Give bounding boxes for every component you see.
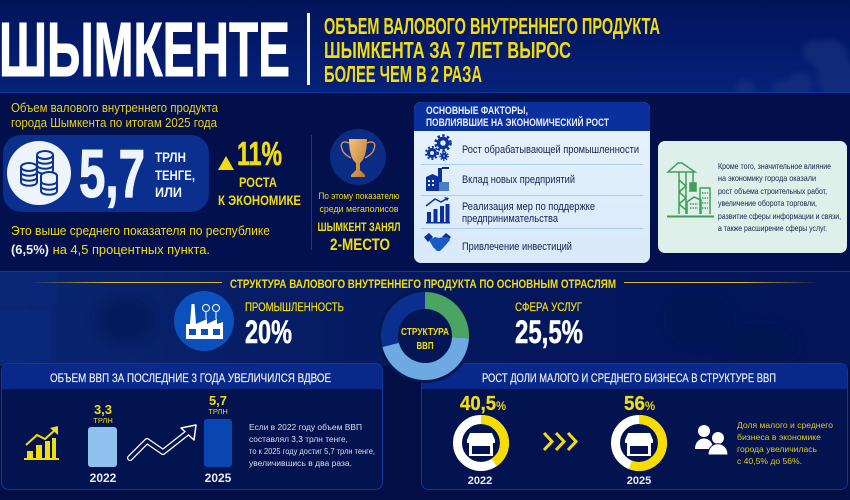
additional factors text: увеличение оборота торговли, <box>718 198 817 208</box>
intro text: Объем валового внутреннего продукта <box>11 101 218 115</box>
icon: factory circle <box>174 291 234 351</box>
bar 2022: 3,3 <box>94 402 112 417</box>
headline: ШЫМКЕНТА ЗА 7 ЛЕТ ВЫРОС <box>324 37 571 63</box>
icon: yellow chart <box>24 426 59 460</box>
panel: GDP 3 years <box>2 364 382 490</box>
stat: services: СФЕРА УСЛУГ <box>515 302 583 314</box>
donut label: ВВП <box>416 340 434 352</box>
panel: GDP value <box>3 135 209 212</box>
icon: coins <box>7 141 71 205</box>
section heading: СТРУКТУРА ВАЛОВОГО ВНУТРЕННЕГО ПРОДУКТА ПО ОСНОВНЫМ ОТРАСЛЯМ <box>230 277 616 291</box>
bar 2022: 2022 <box>90 471 117 485</box>
unit <box>155 150 195 200</box>
donut label: СТРУКТУРА <box>401 326 449 338</box>
stat 2022 <box>458 393 506 487</box>
stat 2022: 40,5% <box>460 393 506 415</box>
SME text: города увеличилась <box>737 444 818 454</box>
panel heading: РОСТ ДОЛИ МАЛОГО И СРЕДНЕГО БИЗНЕСА В СТРУКТУРЕ ВВП <box>482 373 776 385</box>
panel: main factors <box>414 102 650 263</box>
unit: ТРЛН <box>155 150 186 165</box>
icon: crane and buildings <box>667 163 714 216</box>
bar 2025: 2025 <box>205 471 232 485</box>
growth 11% <box>218 135 301 208</box>
factors heading: ОСНОВНЫЕ ФАКТОРЫ, <box>426 105 528 117</box>
panel: SME share <box>422 364 848 490</box>
explanation: увеличившись в два раза. <box>249 458 352 468</box>
rank text: среди мегаполисов <box>320 204 399 214</box>
growth 11%: 11% <box>237 135 282 172</box>
bar 2022 <box>88 402 117 485</box>
stat 2022: 2022 <box>468 475 492 487</box>
donut label <box>401 326 449 352</box>
headline: ОБЪЕМ ВАЛОВОГО ВНУТРЕННЕГО ПРОДУКТА <box>324 13 660 39</box>
factor labels: Реализация мер по поддержке <box>462 201 595 213</box>
explanation: составлял 3,3 трлн тенге, <box>249 434 348 444</box>
stat: services: 25,5% <box>515 314 583 350</box>
factor labels: Вклад новых предприятий <box>462 174 575 186</box>
headline <box>324 13 660 87</box>
stat 2025: 2025 <box>627 475 651 487</box>
factors heading <box>426 105 609 129</box>
SME text <box>737 420 833 466</box>
unit: ТЕНГЕ, <box>155 168 195 183</box>
SME text: с 40,5% до 56%. <box>737 456 802 466</box>
icon: factory <box>426 167 449 191</box>
stat: industry: ПРОМЫШЛЕННОСТЬ <box>245 302 344 314</box>
explanation <box>249 422 375 468</box>
comparison text: (6,5%) на 4,5 процентных пункта. <box>11 242 210 257</box>
additional factors text <box>718 161 841 233</box>
factor labels: Привлечение инвестиций <box>462 241 572 253</box>
comparison text <box>11 223 270 257</box>
icon: growth chart <box>426 197 450 224</box>
divider <box>311 135 312 250</box>
stat: industry <box>245 302 344 350</box>
SME text: Доля малого и среднего <box>737 420 833 430</box>
value 5,7: 5,7 <box>79 136 145 212</box>
factor labels: предпринимательства <box>462 213 559 225</box>
title city name: ШЫМКЕНТЕ <box>0 7 290 93</box>
factor labels: Рост обрабатывающей промышленности <box>462 144 639 156</box>
intro text: города Шымкента по итогам 2025 года <box>11 116 217 130</box>
SME text: бизнеса в экономике <box>737 432 821 442</box>
chevrons <box>544 433 576 450</box>
rank text: По этому показателю <box>318 191 400 201</box>
donut chart <box>378 289 472 383</box>
bar 2025: ТРЛН <box>208 407 228 416</box>
background <box>0 0 850 366</box>
intro text <box>11 101 218 130</box>
icon: people <box>695 425 728 455</box>
additional factors text: рост объема строительных работ, <box>718 186 827 196</box>
arrow <box>130 425 196 458</box>
icon: handshake <box>424 233 451 251</box>
explanation: то к 2025 году достиг 5,7 трлн тенге, <box>249 446 375 456</box>
stat: industry: 20% <box>245 314 292 350</box>
bar 2025 <box>204 393 232 485</box>
stat 2025 <box>616 393 662 487</box>
title divider <box>307 13 310 85</box>
rank text <box>318 191 400 254</box>
unit: ИЛИ <box>155 185 182 200</box>
bar 2025: 5,7 <box>209 393 227 408</box>
stat: services <box>515 302 583 350</box>
panel heading: ОБЪЕМ ВВП ЗА ПОСЛЕДНИЕ 3 ГОДА УВЕЛИЧИЛСЯ ВДВОЕ <box>50 373 331 385</box>
headline: БОЛЕЕ ЧЕМ В 2 РАЗА <box>324 61 482 87</box>
additional factors text: на экономику города оказали <box>718 173 816 183</box>
comparison text: Это выше среднего показателя по республике <box>11 223 270 238</box>
additional factors text: а также расширение сферы услуг. <box>718 223 827 233</box>
growth 11%: РОСТА <box>239 174 277 190</box>
growth 11%: К ЭКОНОМИКЕ <box>218 192 301 208</box>
rank text: ШЫМКЕНТ ЗАНЯЛ <box>318 220 400 234</box>
explanation: Если в 2022 году объем ВВП <box>249 422 362 432</box>
factors heading: ПОВЛИЯВШИЕ НА ЭКОНОМИЧЕСКИЙ РОСТ <box>426 116 609 129</box>
factor labels <box>462 144 639 253</box>
panel: additional factors <box>658 141 847 253</box>
icon: trophy <box>330 129 386 185</box>
stat 2025: 56% <box>624 393 655 415</box>
rank text: 2-МЕСТО <box>330 235 390 254</box>
icon: gears <box>426 136 450 160</box>
bar 2022: ТРЛН <box>93 416 113 425</box>
